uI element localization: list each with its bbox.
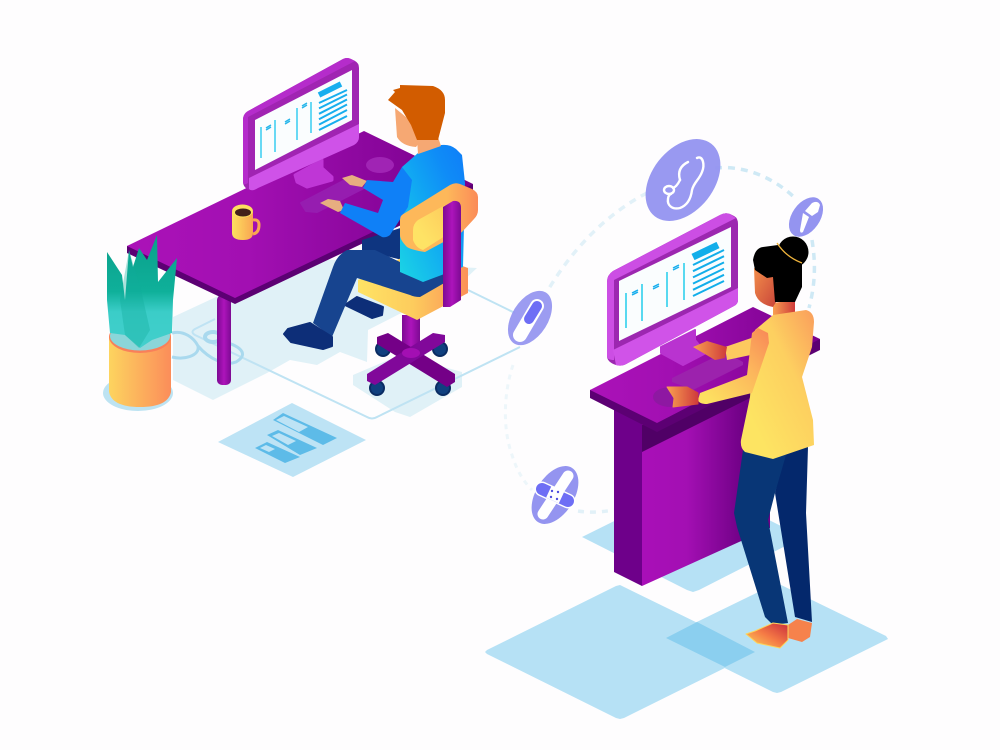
far shoe	[345, 297, 383, 318]
seated man	[284, 85, 468, 395]
plant in pot	[103, 235, 177, 411]
hair bun	[778, 236, 808, 268]
icon: stethoscope badge	[630, 125, 736, 235]
far arm and hand	[725, 335, 765, 360]
floor shapes under left desk	[173, 258, 477, 417]
desk body left side	[614, 400, 642, 586]
torso	[741, 310, 814, 459]
pot body	[109, 337, 171, 407]
floor stethoscope outline	[172, 332, 243, 363]
screen text block	[693, 245, 724, 296]
far thigh	[362, 225, 410, 262]
left keyboard	[301, 179, 364, 212]
right monitor	[607, 213, 738, 366]
monitor body	[243, 58, 359, 190]
bar highlights	[260, 416, 308, 452]
chair column	[402, 315, 420, 360]
chair wheels	[370, 342, 450, 395]
coffee mug	[232, 204, 259, 240]
monitor stand	[295, 160, 332, 187]
left mouse pad	[366, 157, 394, 173]
monitor chin	[249, 124, 359, 190]
desk top edge	[127, 184, 473, 304]
monitor screen	[619, 227, 731, 341]
right keyboard	[672, 352, 743, 390]
monitor screen	[255, 70, 352, 170]
desk leg	[217, 295, 231, 385]
front leg and lap	[313, 250, 446, 337]
desk underside shadow	[642, 362, 770, 452]
right mouse pad	[653, 387, 689, 407]
hair	[753, 245, 802, 302]
face	[395, 108, 422, 147]
chair back	[400, 183, 478, 307]
screen columns	[261, 102, 311, 158]
torso	[400, 145, 465, 282]
desk top	[590, 307, 820, 423]
monitor stand	[661, 330, 706, 365]
chair base	[367, 333, 455, 387]
screen text block	[319, 84, 347, 130]
desk top	[127, 131, 473, 298]
icon: bandage badge	[522, 458, 588, 532]
front shoe	[746, 623, 788, 648]
left desk	[127, 131, 473, 385]
near arm	[698, 328, 769, 404]
chair seat	[358, 250, 468, 320]
hands	[320, 199, 344, 212]
face	[754, 268, 776, 307]
front leg	[734, 450, 788, 625]
chair post	[443, 201, 461, 307]
standing woman	[667, 236, 814, 648]
floor diamonds under right desk	[485, 482, 888, 719]
screen columns	[626, 263, 684, 328]
floor document card	[218, 403, 366, 477]
hair band	[777, 243, 802, 263]
monitor chin	[613, 288, 738, 366]
neck	[773, 300, 795, 318]
icon: pill badge	[499, 283, 561, 353]
back shoe	[788, 619, 812, 642]
near hand	[667, 387, 698, 407]
document bar chart	[255, 413, 337, 463]
hair	[388, 85, 445, 140]
desk top edge	[590, 339, 820, 432]
dashed orbit ring	[505, 168, 814, 512]
arm	[340, 167, 412, 237]
right desk	[590, 307, 820, 586]
leaves	[107, 235, 177, 348]
desk body front	[642, 360, 770, 586]
front shoe	[284, 323, 332, 349]
pot shadow	[103, 375, 173, 411]
neck	[417, 137, 441, 154]
monitor body	[607, 213, 738, 366]
floor outline frame	[192, 290, 520, 418]
back leg	[775, 447, 812, 622]
icon: dropper badge	[782, 191, 830, 243]
left monitor	[243, 58, 359, 190]
